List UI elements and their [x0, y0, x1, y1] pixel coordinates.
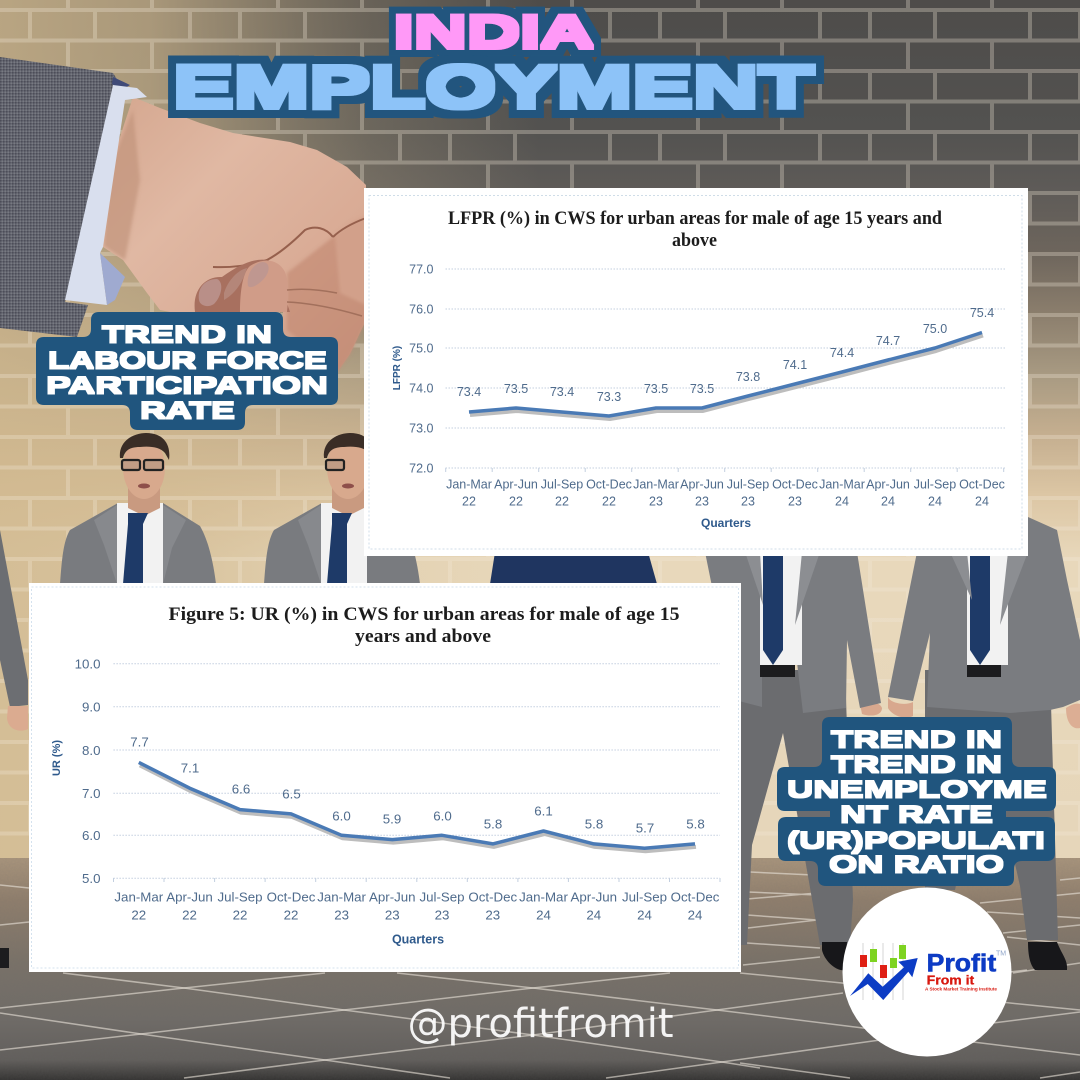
x axis labels: Jan-Mar — [114, 890, 164, 904]
callout: trend in labour force participation rate: RATE — [140, 398, 235, 424]
data labels: 73.4 — [457, 385, 481, 399]
data labels — [130, 734, 705, 836]
x axis labels: 23 — [741, 494, 755, 508]
illustration: clenched fist — [100, 97, 366, 371]
person: second man with glasses — [264, 433, 420, 584]
x axis labels: 22 — [509, 494, 523, 508]
chart title: years and above — [355, 627, 491, 647]
person: fourth man, grey suit — [705, 552, 882, 970]
panel: UR line chart — [29, 583, 741, 972]
data labels: 73.3 — [597, 390, 621, 404]
data labels: 73.8 — [736, 370, 760, 384]
x axis labels: 22 — [555, 494, 569, 508]
logo: Profit From it: TM — [996, 950, 1006, 958]
x axis labels: 24 — [536, 908, 551, 922]
x axis labels: Jan-Mar — [819, 478, 865, 492]
person: fifth man, grey suit — [888, 517, 1080, 970]
callout: trend in labour force participation rate: TREND IN — [102, 322, 272, 348]
data labels: 5.9 — [383, 812, 401, 826]
x axis labels: Apr-Jun — [866, 478, 910, 492]
y axis gridlines and ticks: 7.0 — [82, 786, 100, 801]
y axis title: UR (%) — [51, 740, 63, 776]
y axis gridlines and ticks — [75, 656, 720, 886]
callout: trend in unemployment rate and population ratio: UNEMPLOYME — [787, 776, 1047, 804]
x axis labels: Oct-Dec — [267, 890, 316, 904]
x axis labels: Apr-Jun — [369, 890, 416, 904]
data labels: 74.7 — [876, 334, 900, 348]
x axis labels: 24 — [881, 494, 895, 508]
x axis labels: Apr-Jun — [166, 890, 213, 904]
y axis gridlines and ticks: 8.0 — [82, 743, 100, 758]
person: first man with glasses — [60, 433, 216, 584]
callout: trend in labour force participation rate: PARTICIPATION — [46, 372, 328, 400]
x axis labels: Jan-Mar — [446, 478, 492, 492]
logo: Profit From it: A Stock Market Training Institute — [925, 986, 997, 992]
callout: trend in unemployment rate and population ratio: ON RATIO — [829, 852, 1004, 878]
chart title: Figure 5: UR (%) in CWS for urban areas for male of age 15 — [168, 605, 680, 625]
data labels: 75.4 — [970, 306, 994, 320]
logo: Profit From it — [842, 888, 1012, 1056]
icon: candlestick chart with rising arrow — [850, 943, 918, 1000]
y axis gridlines and ticks: 77.0 — [409, 262, 434, 276]
y axis gridlines and ticks: 5.0 — [82, 871, 100, 886]
x axis labels: Apr-Jun — [571, 890, 617, 904]
person: far left, partially visible — [0, 530, 28, 968]
person: navy suit torso — [490, 552, 657, 584]
data labels: 6.5 — [282, 786, 301, 802]
data labels: 6.1 — [534, 804, 553, 818]
x axis labels: Jul-Sep — [622, 890, 667, 904]
data labels: 73.5 — [504, 382, 528, 396]
chart title: above — [672, 231, 717, 251]
y axis gridlines and ticks: 76.0 — [409, 302, 434, 316]
y axis gridlines and ticks: 10.0 — [75, 656, 100, 672]
callout: trend in unemployment rate and population ratio: NT RATE — [840, 802, 993, 828]
x axis labels: Jul-Sep — [217, 890, 263, 904]
y axis gridlines and ticks: 74.0 — [409, 382, 434, 396]
chart title — [448, 209, 943, 251]
x axis labels: 23 — [788, 494, 802, 508]
x axis labels: Apr-Jun — [494, 478, 538, 492]
callout: trend in unemployment rate and population ratio: TREND IN — [831, 726, 1002, 754]
x axis labels: Jul-Sep — [727, 478, 769, 492]
data labels: 73.5 — [644, 382, 668, 396]
panel: LFPR line chart — [364, 188, 1028, 556]
x axis labels: Jul-Sep — [914, 478, 956, 492]
logo: Profit From it: Profit — [927, 950, 997, 978]
callout: trend in unemployment rate and population ratio: (UR)POPULATI — [787, 828, 1045, 854]
callout: trend in unemployment rate and population ratio — [777, 717, 1056, 886]
x axis labels: 23 — [485, 908, 500, 922]
x axis labels: 23 — [385, 908, 400, 922]
x axis labels: 23 — [334, 908, 349, 922]
x axis labels: 24 — [688, 908, 702, 922]
x axis labels: Jan-Mar — [519, 890, 568, 904]
x axis labels: 22 — [284, 908, 298, 922]
chart title — [168, 605, 680, 647]
x axis labels: Jul-Sep — [541, 478, 583, 492]
data labels: 6.6 — [232, 782, 250, 796]
data labels: 73.5 — [690, 382, 714, 396]
x axis labels: Jan-Mar — [633, 478, 679, 492]
data labels — [457, 306, 994, 404]
x axis labels: 22 — [462, 494, 476, 508]
x axis labels: Jan-Mar — [317, 890, 367, 904]
x axis labels: 24 — [975, 494, 989, 508]
data labels: 7.7 — [130, 734, 149, 750]
x axis labels: 24 — [586, 908, 601, 922]
x axis labels — [114, 890, 720, 922]
illustration: grey suit sleeve and cuff — [0, 57, 147, 337]
callout: trend in labour force participation rate — [36, 312, 338, 430]
data labels: 6.0 — [332, 808, 351, 824]
x axis title: Quarters — [701, 516, 751, 530]
title: EMPLOYMENT: EMPLOYMENT — [173, 55, 814, 120]
x axis labels: 23 — [435, 908, 449, 922]
x axis labels: 24 — [928, 494, 942, 508]
data labels: 74.4 — [830, 346, 854, 360]
logo: Profit From it: From it — [927, 972, 975, 988]
data labels: 5.7 — [636, 820, 654, 836]
data labels: 5.8 — [484, 816, 502, 832]
x axis labels: 22 — [602, 494, 616, 508]
y axis gridlines and ticks: 9.0 — [82, 700, 100, 714]
data labels: 5.8 — [585, 816, 603, 832]
data line — [469, 332, 983, 419]
x axis labels: Oct-Dec — [959, 478, 1005, 492]
y axis title: LFPR (%) — [392, 346, 403, 390]
data labels: 6.0 — [433, 808, 452, 824]
data labels: 7.1 — [181, 760, 199, 776]
x axis labels: 24 — [835, 494, 849, 508]
x axis labels: Oct-Dec — [586, 478, 632, 492]
x axis labels: Jul-Sep — [419, 890, 465, 904]
callout: trend in unemployment rate and population ratio: TREND IN — [831, 752, 1002, 778]
data line — [139, 762, 696, 851]
data labels: 75.0 — [923, 322, 947, 336]
data labels: 74.1 — [783, 358, 807, 372]
x axis labels: 24 — [637, 908, 652, 922]
y axis gridlines and ticks: 6.0 — [82, 828, 100, 843]
handle text: @profitfromit — [408, 1001, 674, 1047]
x axis labels: 23 — [695, 494, 709, 508]
data labels: 5.8 — [686, 816, 705, 832]
y axis gridlines and ticks: 72.0 — [409, 462, 434, 476]
x axis labels: Apr-Jun — [680, 478, 724, 492]
chart title: LFPR (%) in CWS for urban areas for male of age 15 years and — [448, 209, 943, 229]
x axis labels: 23 — [649, 494, 663, 508]
x axis labels: Oct-Dec — [671, 890, 720, 904]
x axis labels: 22 — [131, 908, 146, 922]
background: tiled floor — [0, 858, 1080, 1080]
x axis labels — [446, 478, 1005, 508]
title: INDIA: INDIA — [394, 6, 594, 58]
x axis labels: Oct-Dec — [468, 890, 518, 904]
x axis labels: 22 — [233, 908, 247, 922]
x axis labels: 22 — [182, 908, 197, 922]
y axis gridlines and ticks: 73.0 — [409, 422, 434, 436]
y axis gridlines and ticks: 75.0 — [409, 342, 434, 356]
x axis title: Quarters — [392, 932, 444, 946]
data labels: 73.4 — [550, 385, 574, 399]
y axis gridlines and ticks — [409, 262, 1005, 476]
x axis labels: Oct-Dec — [772, 478, 818, 492]
callout: trend in labour force participation rate: LABOUR FORCE — [48, 348, 327, 374]
